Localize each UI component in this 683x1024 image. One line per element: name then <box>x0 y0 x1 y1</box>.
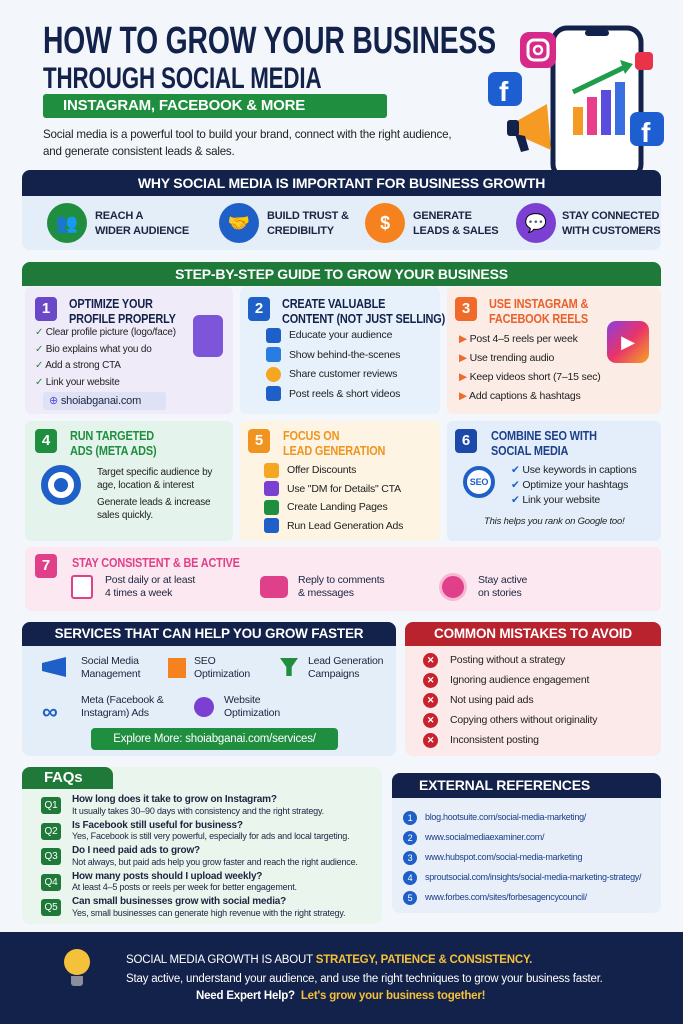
panel: mistakes: Not using paid ads <box>450 694 533 706</box>
panel: FAQs: Q5 <box>45 902 57 913</box>
card 7: on stories <box>478 587 522 599</box>
card 3: ▶ <box>621 332 635 352</box>
item: trust <box>219 203 349 243</box>
panel: FAQs: Do I need paid ads to grow? <box>72 845 200 856</box>
panel: FAQs: Q2 <box>45 826 57 836</box>
card 5: Run Lead Generation Ads <box>287 520 403 532</box>
card 2: Educate your audience <box>289 329 392 341</box>
panel: FAQs: At least 4–5 posts or reels per week for better engagement. <box>72 882 297 892</box>
panel: FAQs: Q4 <box>45 876 57 888</box>
card 6 <box>447 421 661 541</box>
footer: Stay active, understand your audience, and use the right techniques to grow your business faster. <box>126 973 603 985</box>
card 6: 6 <box>462 432 470 449</box>
card 1: OPTIMIZE YOUR <box>69 296 153 311</box>
panel: FAQs: How long does it take to grow on Instagram? <box>72 794 277 805</box>
title: HOW TO GROW YOUR BUSINESS <box>43 20 496 62</box>
item: connected <box>516 203 660 243</box>
panel: services: Optimization <box>194 668 250 680</box>
panel: mistakes <box>405 622 661 756</box>
intro text: Social media is a powerful tool to build your brand, connect with the right audience, <box>43 128 451 141</box>
panel: mistakes: ✕ <box>427 675 434 685</box>
intro text <box>43 128 451 158</box>
card 2: 2 <box>255 300 263 317</box>
panel: external references: 4 <box>408 873 412 883</box>
card 7: Reply to comments <box>298 574 384 586</box>
panel: mistakes: ✕ <box>427 735 434 745</box>
panel: why social media <box>22 170 661 250</box>
panel: external references: www.hubspot.com/social-media-marketing <box>425 852 582 862</box>
panel: services: Social Media <box>81 655 139 667</box>
panel: services: Campaigns <box>308 668 359 680</box>
card 1 <box>25 287 233 414</box>
panel: external references: www.socialmediaexaminer.com/ <box>425 832 544 842</box>
heading: step-by-step <box>22 262 661 286</box>
panel: FAQs <box>22 767 382 924</box>
item: leads: $ <box>380 213 390 233</box>
panel: FAQs: How many posts should I upload weekly? <box>72 870 262 882</box>
footer <box>0 932 683 1024</box>
card 2: Post reels & short videos <box>289 388 400 400</box>
card 5: Create Landing Pages <box>287 501 388 513</box>
panel: FAQs: Can small businesses grow with social media? <box>72 896 286 907</box>
card 5 <box>240 421 440 541</box>
card 4: Target specific audience by age, location & interest <box>97 467 212 491</box>
title <box>43 20 496 95</box>
panel: external references <box>392 773 661 913</box>
item: leads <box>365 203 498 243</box>
panel: FAQs: Yes, Facebook is still very powerful, especially for ads and local targeting. <box>72 831 349 841</box>
item: reach: REACH A <box>95 210 143 222</box>
footer: Need Expert Help? Let's grow your business together! <box>196 990 485 1002</box>
intro text: and generate consistent leads & sales. <box>43 145 235 158</box>
panel: FAQs: Is Facebook still useful for business? <box>72 820 243 830</box>
item: leads: GENERATE <box>413 210 472 222</box>
panel: services: Management <box>81 668 140 680</box>
item: reach <box>47 203 189 243</box>
illustration: phone with growth chart: f <box>641 117 651 148</box>
illustration: phone with growth chart <box>488 26 664 170</box>
panel: services: SEO <box>194 655 216 667</box>
panel: external references: www.forbes.com/sites/forbesagencycouncil/ <box>425 892 587 902</box>
card 2: CREATE VALUABLE <box>282 296 385 311</box>
heading: why: WHY SOCIAL MEDIA IS IMPORTANT FOR BUSINESS GROWTH <box>138 175 545 191</box>
card 2: Share customer reviews <box>289 368 397 380</box>
panel: external references: blog.hootsuite.com/social-media-marketing/ <box>425 812 586 822</box>
panel: FAQs: Yes, small businesses can generate high revenue with the right strategy. <box>72 908 345 918</box>
card 6: SOCIAL MEDIA <box>491 443 568 458</box>
card 3: ▶ Add captions & hashtags <box>459 390 581 402</box>
card 3: USE INSTAGRAM & <box>489 296 588 311</box>
illustration: phone with growth chart: f <box>499 76 509 107</box>
card 3: 3 <box>462 300 470 317</box>
panel: mistakes: Copying others without originality <box>450 714 597 726</box>
heading: why <box>22 170 661 196</box>
panel: mistakes: Ignoring audience engagement <box>450 674 589 686</box>
item: connected: WITH CUSTOMERS <box>562 225 660 237</box>
card 3: ▶ Use trending audio <box>459 352 554 364</box>
item: trust: 🤝 <box>228 213 250 233</box>
subtitle bar: INSTAGRAM, FACEBOOK & MORE <box>63 97 305 114</box>
card 6: This helps you rank on Google too! <box>484 516 625 527</box>
card 1: ✓ Add a strong CTA <box>35 360 121 371</box>
card 4: Generate leads & increase sales quickly. <box>97 497 210 521</box>
card 7 <box>25 547 661 611</box>
icon: light bulb <box>64 949 90 986</box>
panel: mistakes: ✕ <box>427 715 434 725</box>
card 6: ✔ Use keywords in captions <box>511 464 637 476</box>
panel: services: SERVICES THAT CAN HELP YOU GROW FASTER <box>55 626 363 641</box>
item: leads: LEADS & SALES <box>413 225 498 237</box>
card 6: COMBINE SEO WITH <box>491 428 597 443</box>
panel: FAQs: It usually takes 30–90 days with consistency and the right strategy. <box>72 806 324 816</box>
item: reach: 👥 <box>56 213 78 233</box>
item: trust: CREDIBILITY <box>267 225 334 237</box>
card 6: SEO <box>470 477 488 487</box>
card 6: ✔ Link your website <box>511 494 600 506</box>
panel: FAQs: Q1 <box>45 800 57 811</box>
card 1: PROFILE PROPERLY <box>69 311 176 326</box>
footer: SOCIAL MEDIA GROWTH IS ABOUT STRATEGY, PATIENCE & CONSISTENCY. <box>126 954 532 966</box>
panel: mistakes: COMMON MISTAKES TO AVOID <box>434 626 632 641</box>
card 2 <box>240 287 440 414</box>
panel: mistakes: Posting without a strategy <box>450 654 565 666</box>
item: connected: 💬 <box>525 213 547 233</box>
panel: external references: 5 <box>408 893 412 903</box>
card 3: FACEBOOK REELS <box>489 311 588 326</box>
card 7: 4 times a week <box>105 587 172 599</box>
panel: services: Explore More: shoiabganai.com/services/ <box>113 733 316 745</box>
panel: FAQs: Q3 <box>45 851 57 862</box>
card 1: 1 <box>42 300 50 317</box>
card 5: LEAD GENERATION <box>283 443 385 458</box>
card 5: 5 <box>255 432 263 449</box>
panel: services <box>22 622 396 756</box>
card 3: ▶ Keep videos short (7–15 sec) <box>459 371 601 383</box>
card 1: ✓ Bio explains what you do <box>35 344 152 354</box>
heading: step-by-step: STEP-BY-STEP GUIDE TO GROW YOUR BUSINESS <box>175 266 508 282</box>
panel: external references: 2 <box>408 833 412 843</box>
card 7: Stay active <box>478 574 527 586</box>
card 1: ⊕ shoiabganai.com <box>49 395 141 407</box>
card 4: 4 <box>42 432 50 449</box>
panel: external references: 1 <box>408 813 412 823</box>
panel: services: Instagram) Ads <box>81 707 149 719</box>
card 4: RUN TARGETED <box>70 428 154 443</box>
card 2: CONTENT (NOT JUST SELLING) <box>282 311 445 326</box>
card 7: & messages <box>298 587 354 599</box>
panel: services: Optimization <box>224 707 280 719</box>
item: reach: WIDER AUDIENCE <box>95 225 189 237</box>
panel: services: ∞ <box>42 699 57 724</box>
panel: external references: sproutsocial.com/insights/social-media-marketing-strategy/ <box>425 872 641 882</box>
card 4 <box>25 421 233 541</box>
panel: FAQs: FAQs <box>44 769 82 786</box>
panel: FAQs: Not always, but paid ads help you grow faster and reach the right audience. <box>72 856 358 866</box>
card 7: 7 <box>42 557 50 574</box>
panel: services: Lead Generation <box>308 655 383 667</box>
card 3: ▶ Post 4–5 reels per week <box>459 333 578 345</box>
card 4: ADS (META ADS) <box>70 443 156 458</box>
panel: mistakes: ✕ <box>427 655 434 665</box>
card 7: STAY CONSISTENT & BE ACTIVE <box>72 555 240 570</box>
item: trust: BUILD TRUST & <box>267 210 349 222</box>
subtitle bar <box>43 94 387 118</box>
card 1: ✓ Clear profile picture (logo/face) <box>35 327 176 338</box>
card 2: Show behind-the-scenes <box>289 348 400 360</box>
item: connected: STAY CONNECTED <box>562 210 659 222</box>
panel: mistakes: ✕ <box>427 695 434 705</box>
card 6: ✔ Optimize your hashtags <box>511 479 628 491</box>
card 5: FOCUS ON <box>283 428 339 443</box>
card 5: Use "DM for Details" CTA <box>287 482 401 494</box>
card 1: ✓ Link your website <box>35 376 120 388</box>
title: THROUGH SOCIAL MEDIA <box>43 62 321 95</box>
panel: mistakes: Inconsistent posting <box>450 734 539 746</box>
card 5: Offer Discounts <box>287 464 356 476</box>
panel: services: Website <box>224 694 260 706</box>
panel: external references: EXTERNAL REFERENCES <box>419 777 590 793</box>
panel: external references: 3 <box>408 853 412 863</box>
panel: services: Meta (Facebook & <box>81 694 164 706</box>
card 3 <box>447 287 661 414</box>
card 7: Post daily or at least <box>105 574 195 586</box>
